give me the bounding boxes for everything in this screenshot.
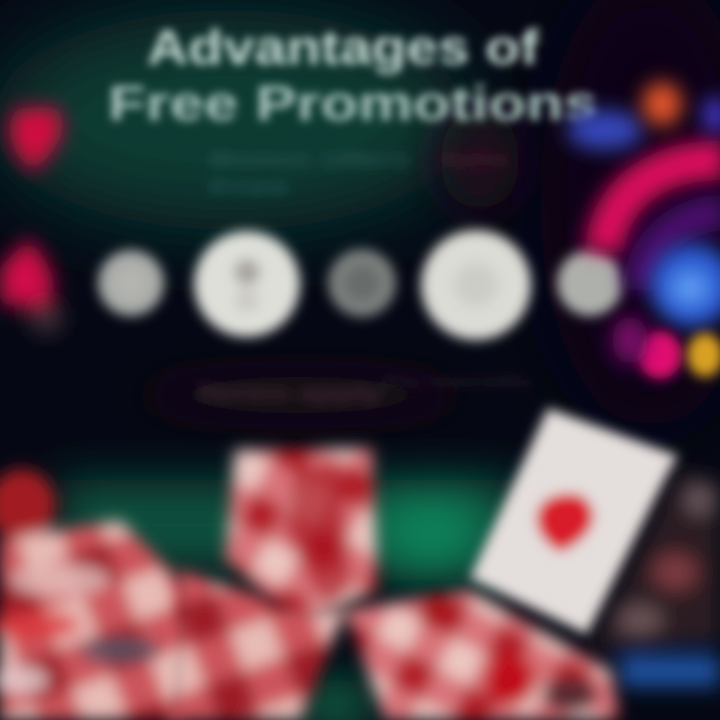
green felt table	[60, 480, 520, 720]
left red hearts	[0, 106, 64, 334]
subtitle text: Free	[210, 178, 290, 197]
icon: upper red heart	[9, 106, 63, 172]
central chip stack	[225, 448, 378, 625]
subtitle text: Spins	[440, 150, 510, 169]
decorative arc: colourful rainbow ring	[567, 82, 720, 379]
caption under circles: Terms apply	[196, 383, 383, 405]
icon: lower red spade	[0, 238, 54, 307]
dark card stack right	[590, 470, 720, 687]
title: Advantages of	[147, 21, 540, 75]
subtitle text	[210, 150, 510, 197]
left chip pile	[0, 469, 190, 720]
subtitle text: Bonus offers	[210, 150, 410, 169]
playing card with heart	[470, 408, 678, 635]
caption under circles: Play responsibly	[382, 373, 532, 389]
centre and bottom chips	[170, 570, 620, 720]
circle 2	[194, 231, 300, 337]
title	[108, 21, 598, 131]
title: Free Promotions	[108, 77, 598, 131]
circle 4	[421, 230, 531, 340]
circle 3	[328, 249, 396, 317]
row of white circles	[98, 230, 623, 340]
circle 1	[98, 250, 164, 316]
circle 5	[557, 250, 623, 316]
caption under circles	[196, 373, 532, 405]
